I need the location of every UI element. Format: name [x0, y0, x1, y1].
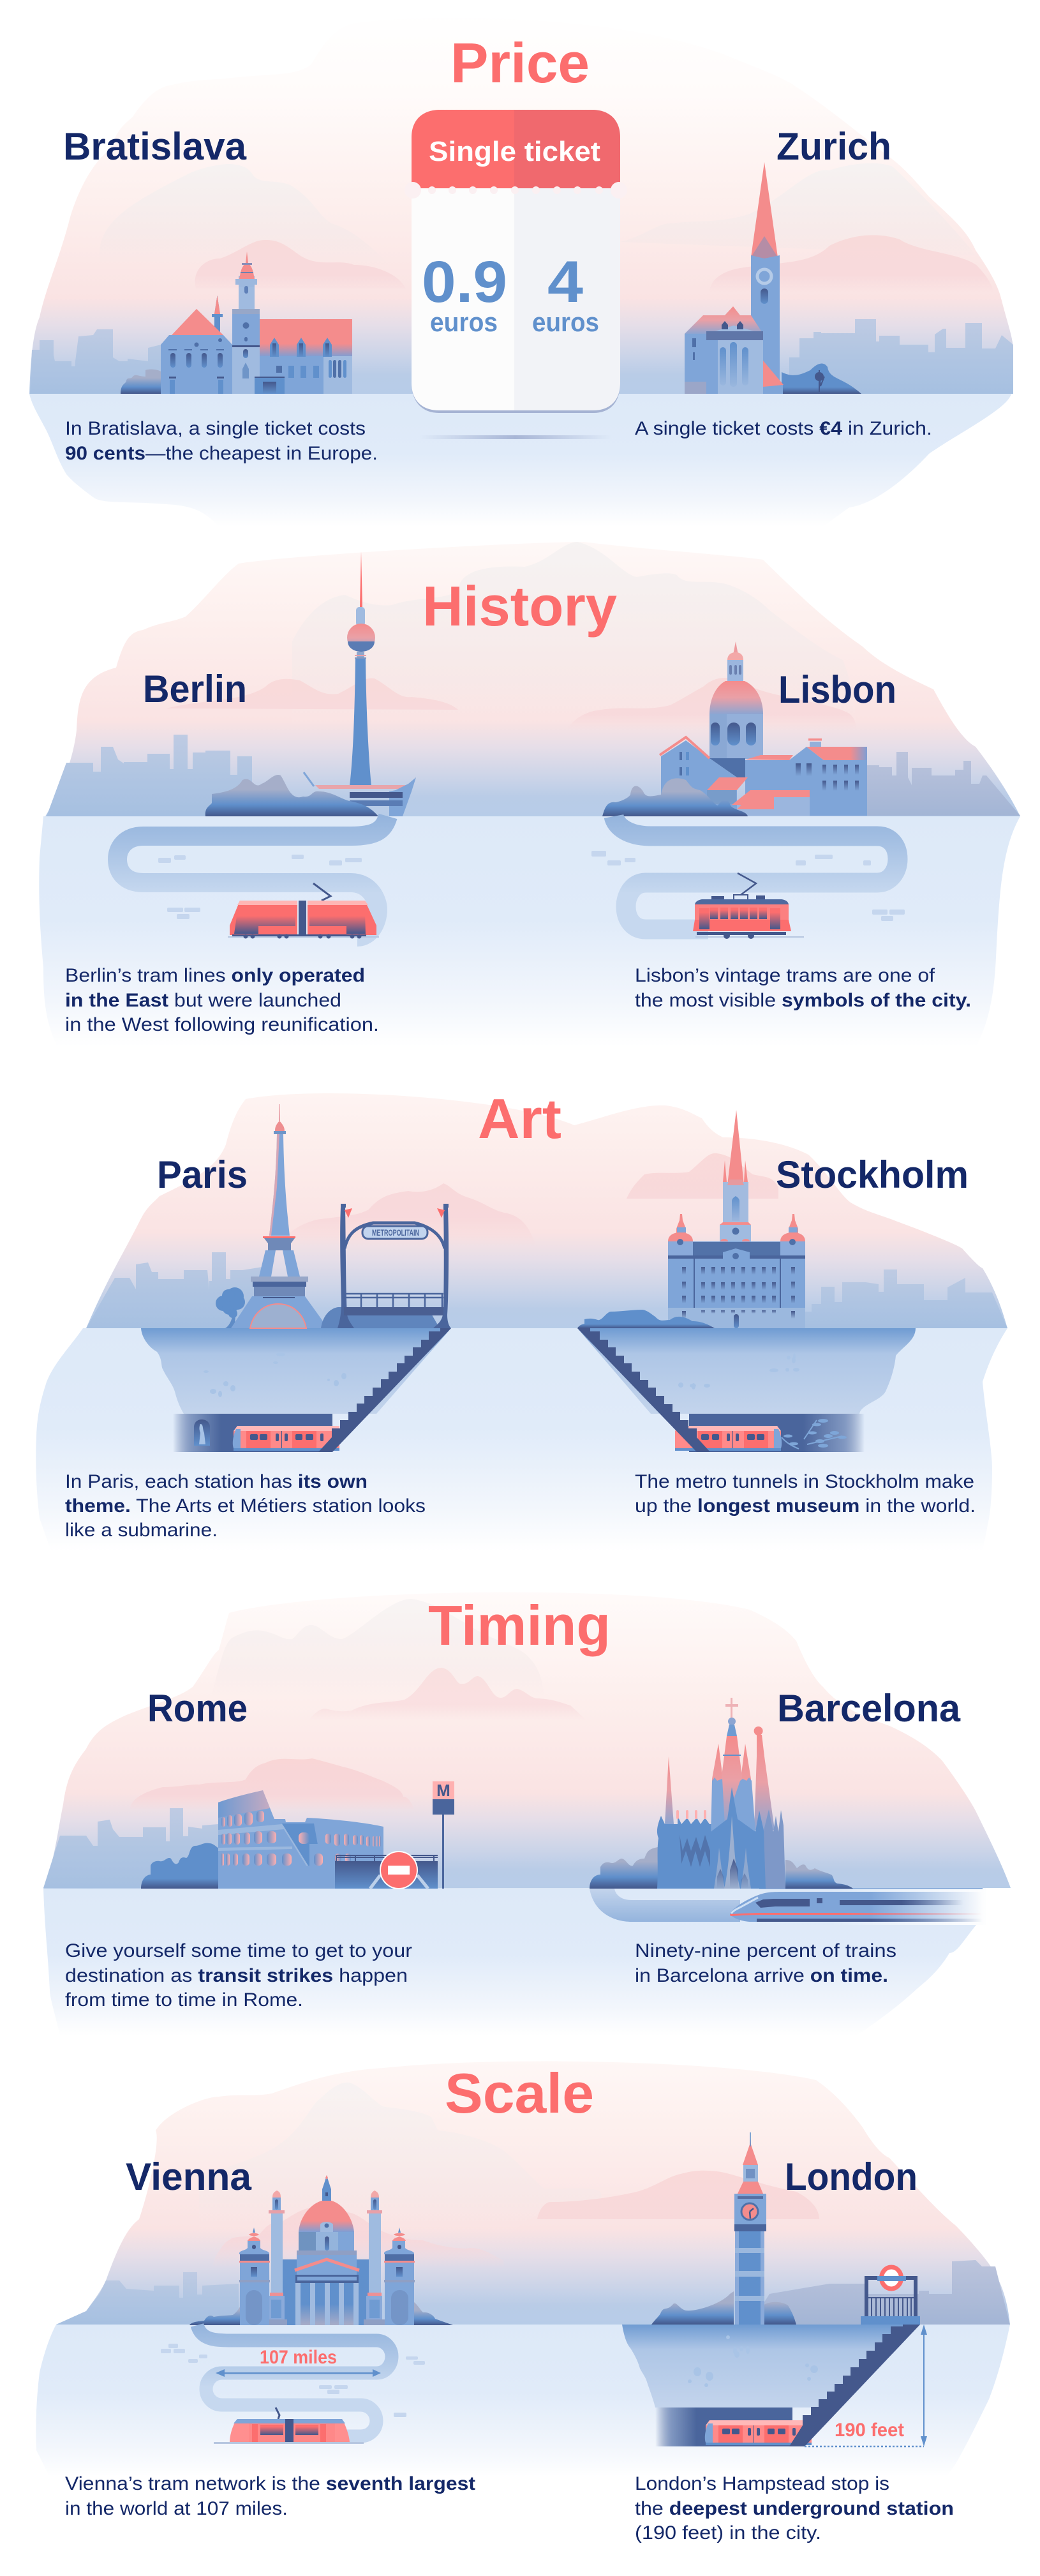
city label: Berlin: Berlin — [143, 668, 247, 710]
underground earth: London — [622, 2325, 920, 2408]
tram: Berlin — [228, 883, 379, 938]
illustration: Lisbon church — [602, 641, 867, 816]
text: Rome line 2: destination as transit strikes happen — [65, 1965, 408, 1986]
stairs: Paris — [318, 1328, 451, 1452]
pebbles — [204, 1352, 799, 1397]
text: Vienna line 1: Vienna’s tram network is the seventh largest — [65, 2473, 475, 2494]
text: Lisbon line 1: Lisbon’s vintage trams are one of — [635, 965, 935, 986]
distance arrow — [216, 2369, 381, 2377]
unit left: euros — [430, 307, 498, 337]
text: Paris line 3: like a submarine. — [65, 1520, 218, 1541]
pebbles — [688, 2335, 818, 2387]
ticket header — [412, 110, 514, 188]
text: Rome line 3: from time to time in Rome. — [65, 1989, 303, 2011]
text: Stockholm line 2: up the longest museum in the world. — [635, 1495, 976, 1516]
pale mountains — [100, 163, 976, 268]
illustration: Stockholm palace — [577, 1110, 805, 1328]
panel: timing — [43, 1592, 1011, 2036]
tram track: Barcelona — [590, 1889, 740, 1922]
pink clouds — [195, 235, 993, 292]
underground earth: Stockholm — [577, 1328, 916, 1414]
text: London line 3: (190 feet) in the city. — [635, 2522, 821, 2543]
sky backdrop — [29, 17, 1013, 394]
ground — [36, 2325, 1010, 2480]
tram track: Vienna — [197, 2325, 392, 2436]
tunnel: London — [655, 2408, 792, 2446]
tunnel: Paris — [173, 1414, 332, 1452]
text: London line 1: London’s Hampstead stop is — [635, 2473, 889, 2494]
value: four: 4 — [547, 250, 583, 315]
text: Bratislava: In Bratislava, a single ticket costs — [65, 418, 366, 439]
illustration: Berlin TV tower — [205, 551, 416, 816]
metro sign — [433, 1781, 454, 1889]
city label: Lisbon: Lisbon — [778, 668, 896, 711]
illustration: metro entrance: METROPOLITAIN — [372, 1227, 419, 1238]
metro train: Paris — [233, 1426, 339, 1451]
tunnel: Stockholm — [689, 1414, 865, 1452]
road-closed sign — [370, 1852, 428, 1889]
title: Art — [478, 1087, 561, 1150]
illustration: Bratislava castle and church — [121, 251, 352, 394]
panel: scale — [36, 2062, 1010, 2543]
panel: art — [36, 1087, 1007, 1551]
illustration: Karlskirche — [189, 2175, 453, 2325]
ticket — [405, 110, 627, 413]
pink clouds — [166, 678, 856, 729]
pink clouds — [281, 1153, 778, 1245]
pink clouds — [212, 2171, 819, 2268]
sky backdrop — [86, 1093, 1007, 1328]
pale mountain — [199, 2083, 601, 2234]
sky backdrop — [43, 1592, 1011, 1889]
price values: 0.9 — [422, 250, 507, 315]
title: Timing — [428, 1594, 611, 1657]
illustration: Zurich church — [685, 162, 861, 394]
stairs: Stockholm — [577, 1328, 710, 1452]
city label: Paris: Paris — [157, 1153, 248, 1196]
sky backdrop — [45, 542, 1020, 816]
depth arrow — [805, 2325, 927, 2446]
title: History — [422, 574, 617, 638]
title: Scale — [445, 2062, 594, 2125]
text: Paris line 1: In Paris, each station has its own — [65, 1471, 368, 1492]
illustration: Colosseum — [141, 1790, 438, 1889]
ticket shadow — [419, 435, 612, 439]
pink cloud lower — [130, 1758, 415, 1810]
tram: Lisbon — [693, 873, 804, 939]
underground entrance — [861, 2267, 920, 2325]
text: Berlin line 2: in the East but were launched — [65, 990, 341, 1011]
city label: Bratislava: Bratislava — [63, 125, 247, 168]
tram track: Berlin — [117, 816, 388, 937]
text: Berlin line 1: Berlin’s tram lines only operated — [65, 965, 365, 986]
underground earth: Paris — [141, 1328, 451, 1414]
city label: Stockholm: Stockholm — [776, 1153, 969, 1196]
text: Vienna line 2: in the world at 107 miles. — [65, 2498, 288, 2519]
tram track: Lisbon — [614, 816, 898, 929]
horizon line right — [759, 1888, 983, 1889]
illustration: Sagrada Familia — [590, 1698, 853, 1889]
tram: Vienna — [214, 2408, 364, 2444]
ground — [43, 1889, 986, 2036]
pale mountain — [211, 1599, 544, 1698]
text: Paris line 2: theme. The Arts et Métiers station looks — [65, 1495, 426, 1516]
white motion fade — [829, 1889, 995, 1925]
metro sign: M — [436, 1781, 450, 1800]
sky backdrop — [56, 2062, 1010, 2325]
text: Lisbon line 2: the most visible symbols of the city. — [635, 990, 971, 1011]
city label: Vienna: Vienna — [126, 2155, 252, 2198]
text: Barcelona line 1: Ninety-nine percent of trains — [635, 1940, 896, 1961]
skyline left — [30, 329, 161, 394]
skyline left — [86, 1252, 262, 1328]
unit right: euros — [532, 307, 599, 337]
skyline right — [805, 1269, 1007, 1328]
skyline right — [867, 752, 1020, 816]
text: Bratislava second line: 90 cents—the cheapest in Europe. — [65, 443, 378, 464]
illustration: Big Ben — [651, 2132, 796, 2325]
title: Price — [450, 31, 590, 94]
leaves mural — [782, 1419, 847, 1449]
ground — [29, 394, 1011, 527]
ticket paper — [412, 191, 620, 413]
ticket heading: Single ticket — [429, 136, 600, 167]
pink cloud upper — [309, 1668, 587, 1721]
statue niche — [194, 1419, 210, 1446]
underground bricks — [158, 855, 362, 919]
text: Barcelona line 2: in Barcelona arrive on time. — [635, 1965, 888, 1986]
skyline right — [789, 319, 1013, 394]
distance label: 107 miles — [260, 2347, 337, 2368]
ground — [39, 816, 1020, 1047]
depth label: 190 feet — [835, 2420, 904, 2441]
text: Rome line 1: Give yourself some time to get to your — [65, 1940, 412, 1961]
city label: London: London — [785, 2155, 917, 2198]
city label: Rome: Rome — [147, 1687, 248, 1730]
city label: Zurich: Zurich — [776, 125, 891, 168]
text: Berlin line 3: in the West following reunification. — [65, 1014, 379, 1035]
perforation — [405, 182, 627, 198]
underground bricks — [591, 851, 905, 921]
text: Zurich: A single ticket costs €4 in Zurich. — [635, 418, 932, 439]
text: Stockholm line 1: The metro tunnels in Stockholm make — [635, 1471, 974, 1492]
skyline left — [47, 735, 252, 816]
illustration: Eiffel Tower — [216, 1104, 328, 1328]
panel: history — [39, 542, 1020, 1047]
metro train: Stockholm — [675, 1426, 782, 1451]
illustration: metro entrance — [321, 1204, 451, 1328]
ground — [36, 1328, 1007, 1551]
underground bricks — [161, 2344, 425, 2417]
pale mountains — [292, 542, 856, 728]
skyline left — [56, 2272, 239, 2325]
skyline — [43, 1808, 218, 1889]
high speed train — [730, 1892, 983, 1922]
metro train: London — [705, 2420, 812, 2445]
panel: price — [29, 17, 1013, 527]
skyline right — [763, 2260, 1010, 2325]
stairs: London — [789, 2325, 920, 2446]
text: London line 2: the deepest underground station — [635, 2498, 954, 2519]
city label: Barcelona: Barcelona — [777, 1687, 961, 1730]
